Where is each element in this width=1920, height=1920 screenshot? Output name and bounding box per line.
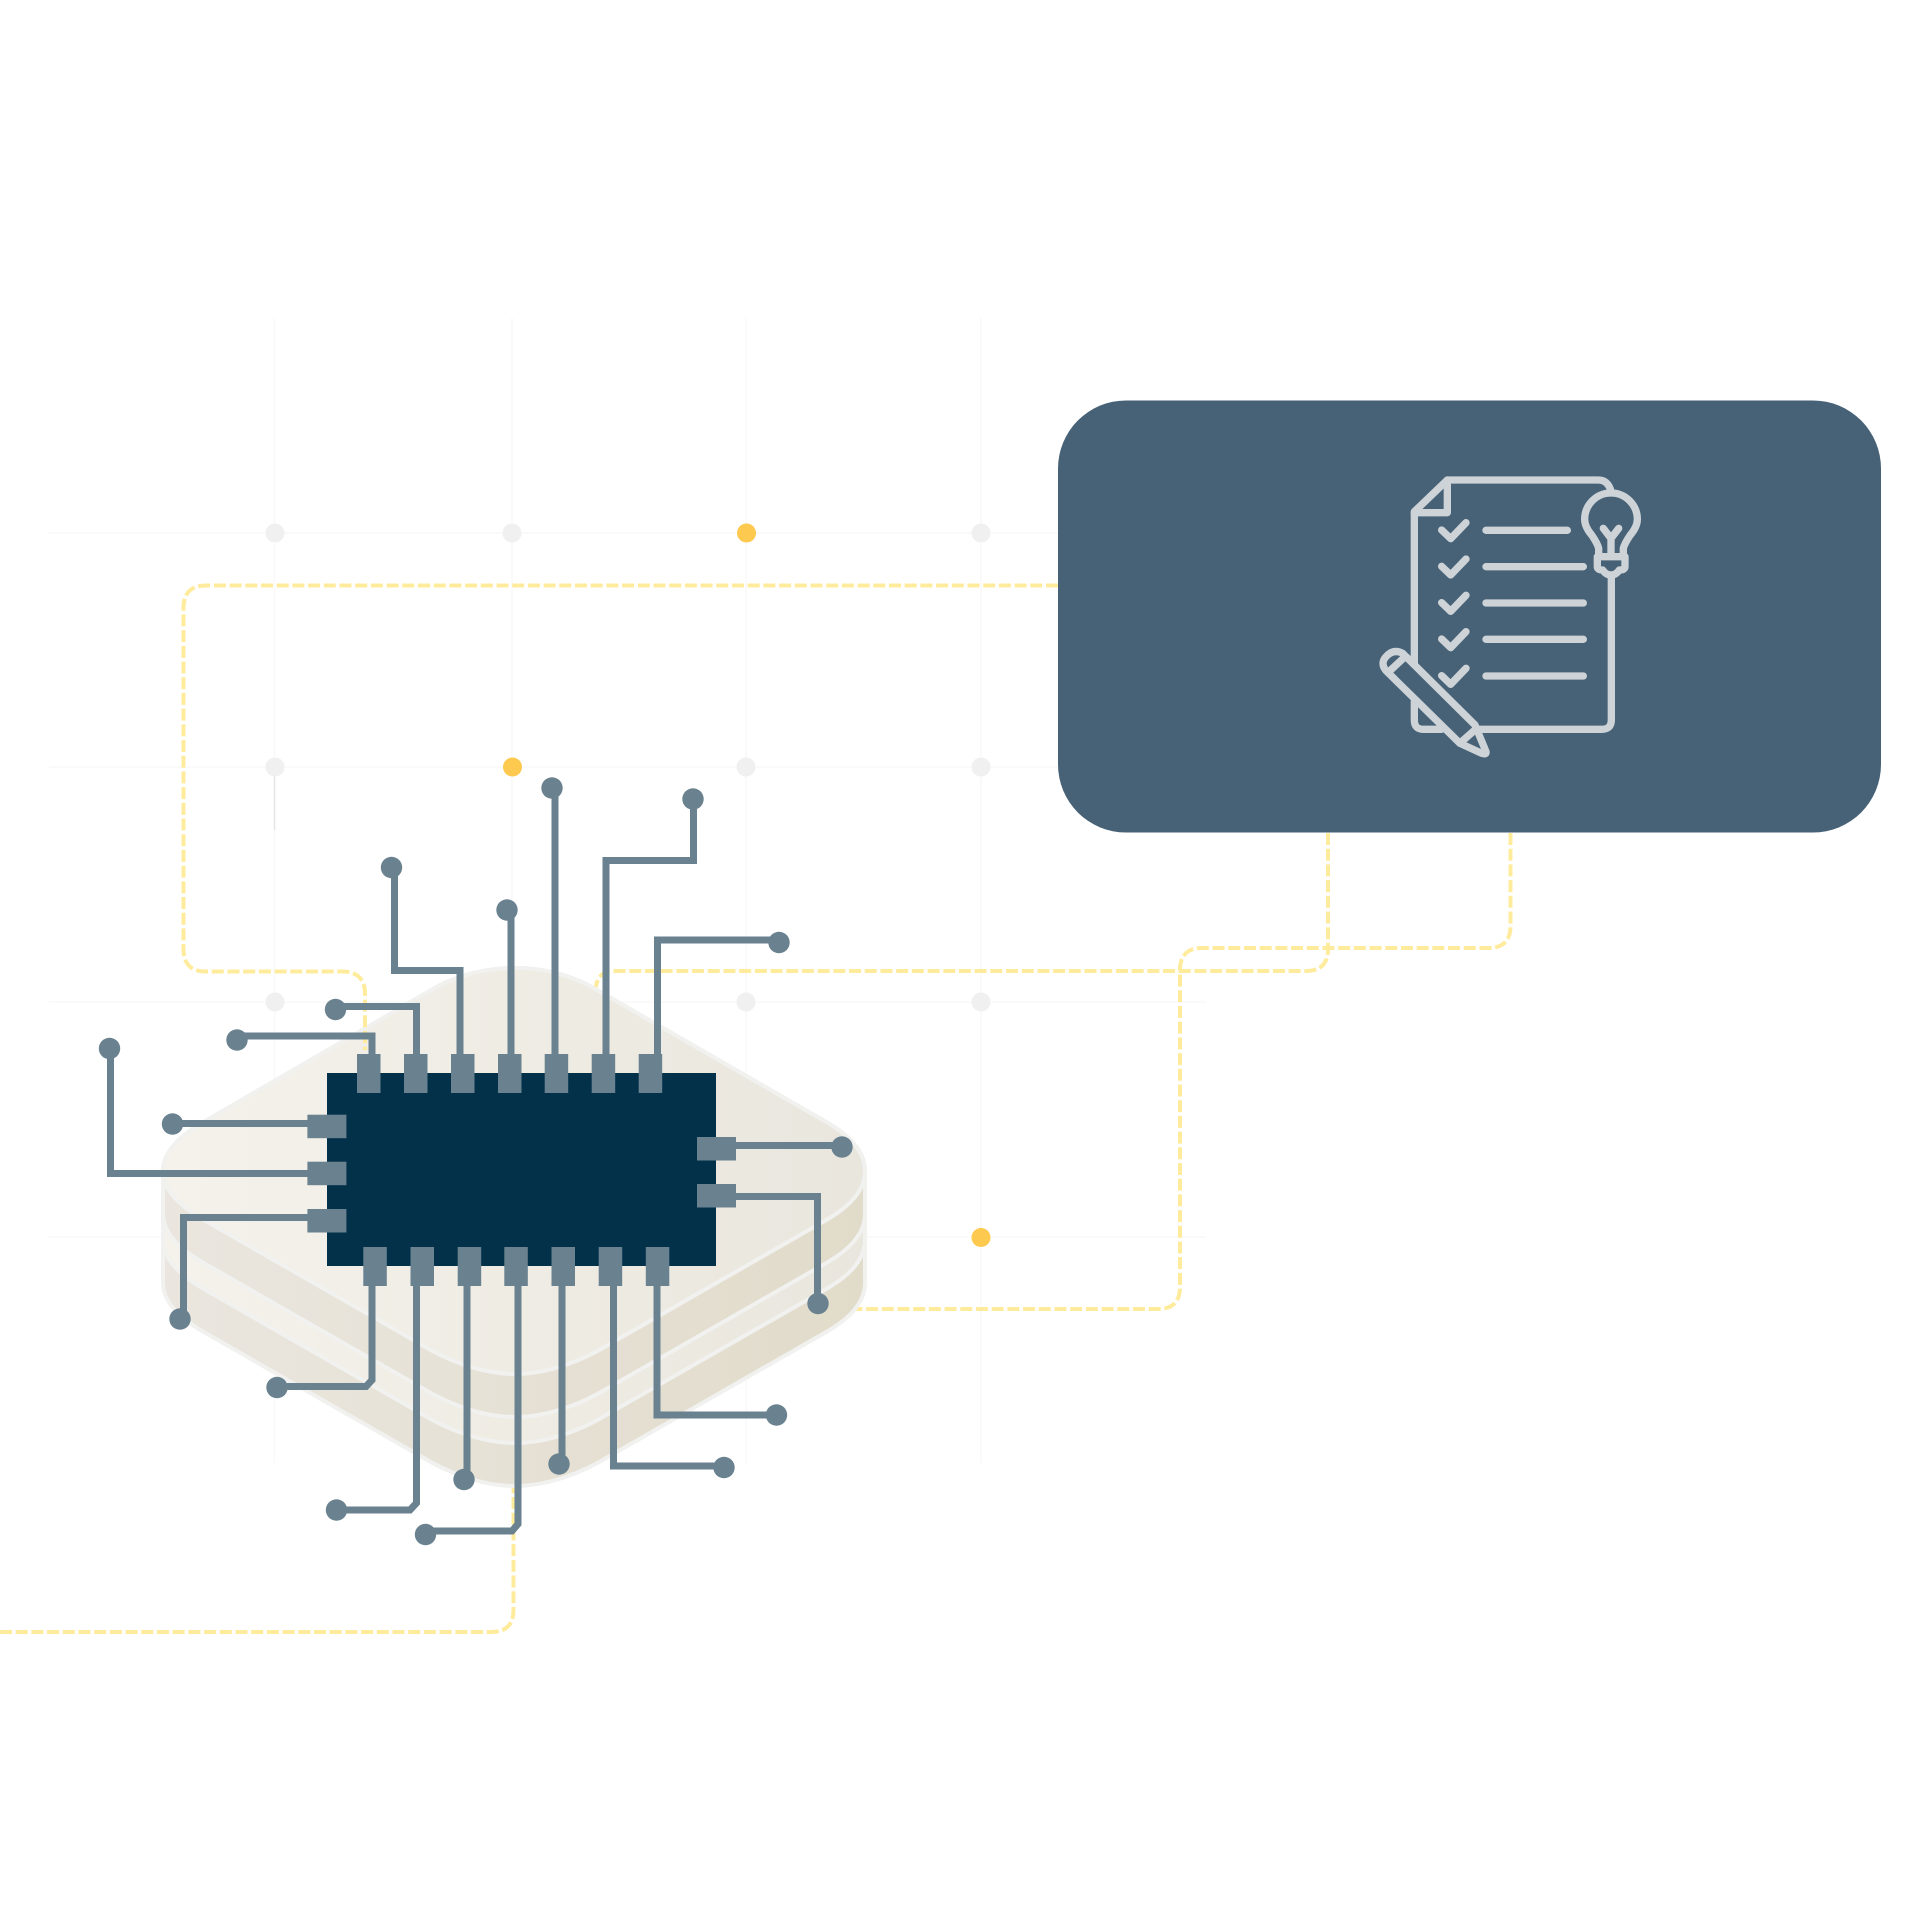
background grid: [49, 318, 1206, 1463]
icon: checklist document with pencil and light bulb: [1383, 480, 1637, 754]
chip traces: [110, 790, 842, 1531]
layered base plate: [163, 968, 865, 1486]
dashed yellow connectors: [0, 833, 1510, 1632]
chip contact pads: [307, 1054, 736, 1286]
microchip body: [327, 1073, 716, 1266]
dashed connector entering the chip: [184, 586, 1058, 1050]
trace end points: [99, 777, 853, 1545]
panel: checklist card: [1058, 400, 1881, 832]
